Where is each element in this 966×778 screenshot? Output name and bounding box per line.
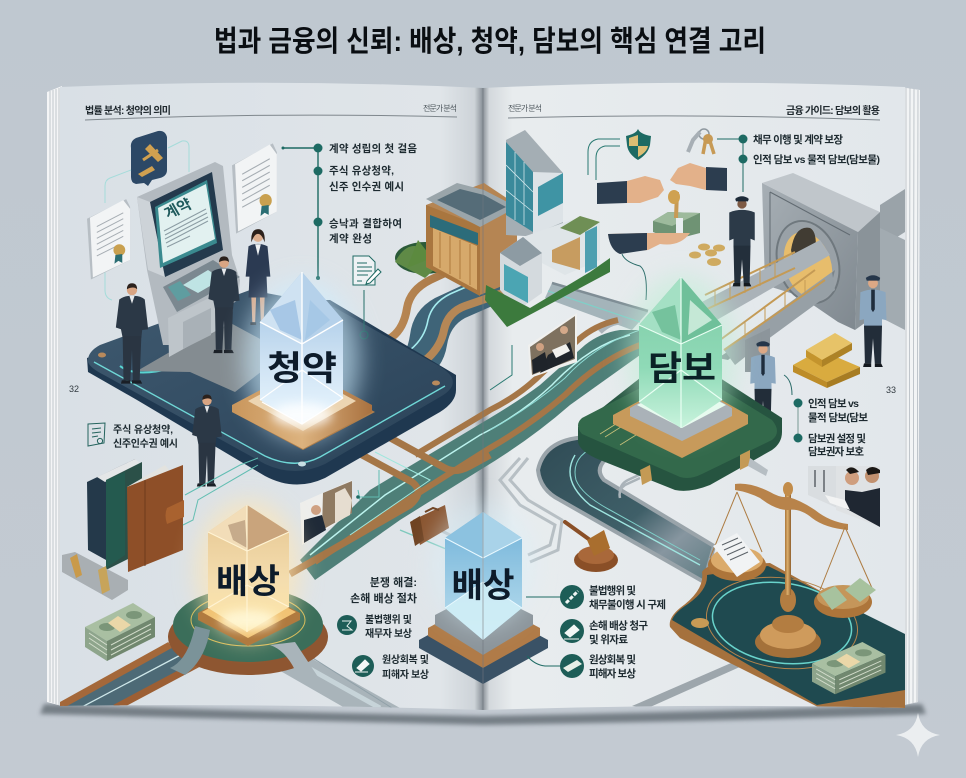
text: right lower bullets: 인적 담보 vs bbox=[808, 397, 859, 410]
text: stock subscription: 주식 유상청약, bbox=[113, 423, 173, 436]
text: stock subscription: 신주인수권 예시 bbox=[113, 437, 178, 450]
page header right: 금융 가이드: 담보의 활용 bbox=[786, 104, 880, 117]
page numbers: 33 bbox=[886, 385, 896, 395]
page header left bbox=[85, 103, 457, 120]
connectors to right bullets bbox=[526, 597, 565, 666]
open book bbox=[40, 83, 926, 725]
icon and text: illegal act left bbox=[337, 613, 412, 640]
icon and text: remedy bbox=[560, 584, 666, 611]
title: 법과 금융의 신뢰: 배상, 청약, 담보의 핵심 연결 고리 bbox=[214, 25, 766, 58]
icon and text: damages claim bbox=[560, 619, 648, 646]
left pan with document bbox=[710, 492, 762, 558]
text: top right bullets bbox=[753, 133, 880, 166]
connector lines under 청약 bbox=[183, 458, 379, 525]
road: bottom left bbox=[60, 640, 400, 708]
platform: gold bbox=[168, 588, 328, 675]
book stack bbox=[87, 459, 184, 572]
platform: contract bbox=[87, 290, 456, 485]
text: dispute bbox=[350, 576, 417, 605]
briefcase bbox=[410, 505, 449, 546]
pipes from green platform bbox=[618, 474, 640, 498]
office tower bbox=[485, 130, 610, 327]
icon and text: restoration: 피해자 보상 bbox=[589, 667, 636, 680]
text: contract bullets: 신주 인수권 예시 bbox=[329, 180, 404, 193]
hands and key bbox=[597, 163, 727, 266]
building bbox=[395, 183, 517, 296]
gavel badge icon bbox=[131, 131, 167, 186]
page header right bbox=[508, 103, 880, 120]
crystal: 담보 bbox=[613, 275, 748, 458]
connector: keys to timeline bbox=[717, 134, 748, 192]
icon: shield bbox=[588, 129, 651, 180]
icon and text: remedy: 채무불이행 시 구제 bbox=[589, 598, 666, 611]
scroll bbox=[62, 552, 128, 600]
photo: office right bbox=[808, 466, 880, 527]
ramp with rails bbox=[700, 240, 835, 372]
photo: meeting near 담보 bbox=[528, 313, 577, 378]
page edges left bbox=[47, 86, 62, 706]
road: grey conduit right bbox=[538, 437, 714, 582]
pipes beside blue crystal bbox=[400, 458, 562, 562]
icon and text: restoration left: 피해자 보상 bbox=[382, 668, 429, 681]
crystal label: 배상 bbox=[216, 563, 280, 601]
book shadow bbox=[40, 704, 926, 725]
crystal: blue bbox=[419, 503, 548, 684]
text: stock subscription bbox=[88, 423, 178, 450]
connector lines around kiosk bbox=[105, 141, 189, 300]
crystal label: 배상 bbox=[452, 567, 514, 605]
page header left: 법률 분석: 청약의 의미 bbox=[85, 104, 171, 117]
crystal label: 담보 bbox=[648, 350, 716, 388]
kiosk bbox=[137, 162, 240, 357]
icon and text: damages claim: 및 위자료 bbox=[589, 633, 628, 646]
right page bbox=[483, 83, 905, 710]
right pan with money bbox=[820, 527, 872, 590]
teal scale platform bbox=[670, 563, 905, 708]
text: right lower bullets: 담보권자 보호 bbox=[808, 445, 864, 458]
left page bbox=[60, 83, 483, 710]
road: contract to building bbox=[388, 272, 648, 366]
text: contract bullets bbox=[329, 142, 417, 245]
money on teal platform bbox=[812, 642, 886, 694]
guards bbox=[729, 196, 886, 428]
icon and text: restoration left bbox=[352, 653, 429, 681]
text: right lower bullets bbox=[808, 397, 868, 458]
icon: document with pen bbox=[353, 256, 381, 339]
icon and text: illegal act left: 불법행위 및 bbox=[365, 613, 412, 626]
crystal label: 청약 bbox=[267, 350, 337, 388]
icon and text: remedy: 불법행위 및 bbox=[589, 584, 636, 597]
connector to photo bbox=[490, 345, 512, 390]
icon and text: restoration left: 원상회복 및 bbox=[382, 653, 429, 666]
right lower timeline bbox=[784, 375, 802, 442]
kiosk screen bbox=[150, 172, 223, 277]
text: contract bullets: 승낙과 결합하여 bbox=[329, 217, 402, 230]
crystal: gold bbox=[196, 500, 300, 646]
text: right lower bullets: 물적 담보(담보 bbox=[808, 411, 868, 424]
page header right: 전문가 분석 bbox=[508, 103, 542, 113]
keyboard bbox=[163, 260, 240, 312]
people at kiosk bbox=[116, 229, 270, 486]
page numbers: 32 bbox=[69, 384, 79, 394]
icon and text: restoration bbox=[560, 653, 636, 680]
road junctions at gold platform bbox=[170, 626, 320, 680]
gold bars bbox=[793, 333, 860, 388]
timeline: contract bbox=[282, 144, 322, 280]
page numbers bbox=[69, 384, 896, 395]
road: collateral to damages bbox=[300, 320, 655, 580]
text: dispute: 분쟁 해결: bbox=[370, 576, 417, 589]
vault bbox=[762, 173, 905, 330]
text: contract bullets: 계약 성립의 첫 걸음 bbox=[329, 142, 417, 155]
money in hand bbox=[653, 212, 700, 236]
bottom bar lower right bbox=[632, 663, 739, 706]
crystal: 청약 bbox=[232, 272, 375, 450]
platform: collateral bbox=[578, 378, 782, 491]
text: dispute: 손해 배상 절차 bbox=[350, 591, 417, 605]
page edges right bbox=[900, 87, 920, 706]
sparkle watermark bbox=[896, 713, 940, 757]
documents bbox=[87, 143, 277, 279]
kiosk: 계약 bbox=[161, 196, 195, 222]
text: top right bullets: 인적 담보 vs 물적 담보(담보물) bbox=[753, 153, 880, 166]
icon and text: illegal act left: 재무자 보상 bbox=[365, 627, 412, 640]
connector from hand to crystal bbox=[622, 254, 646, 300]
spine line bbox=[482, 88, 484, 710]
text: top right bullets: 채무 이행 및 계약 보장 bbox=[753, 133, 843, 146]
money stack left bbox=[85, 603, 155, 661]
text: contract bullets: 계약 완성 bbox=[329, 232, 372, 245]
road: brown loop to gold crystal bbox=[290, 435, 490, 574]
icon and text: restoration: 원상회복 및 bbox=[589, 653, 636, 666]
text: contract bullets: 주식 유상청약, bbox=[329, 164, 394, 177]
icon: keys bbox=[688, 129, 714, 154]
page header left: 전문가 분석 bbox=[423, 103, 457, 113]
photo: meeting left bbox=[300, 480, 352, 545]
text: right lower bullets: 담보권 설정 및 bbox=[808, 432, 866, 445]
icon and text: damages claim: 손해 배상 청구 bbox=[589, 619, 648, 632]
gavel bbox=[565, 522, 618, 572]
scales of justice bbox=[708, 482, 876, 658]
